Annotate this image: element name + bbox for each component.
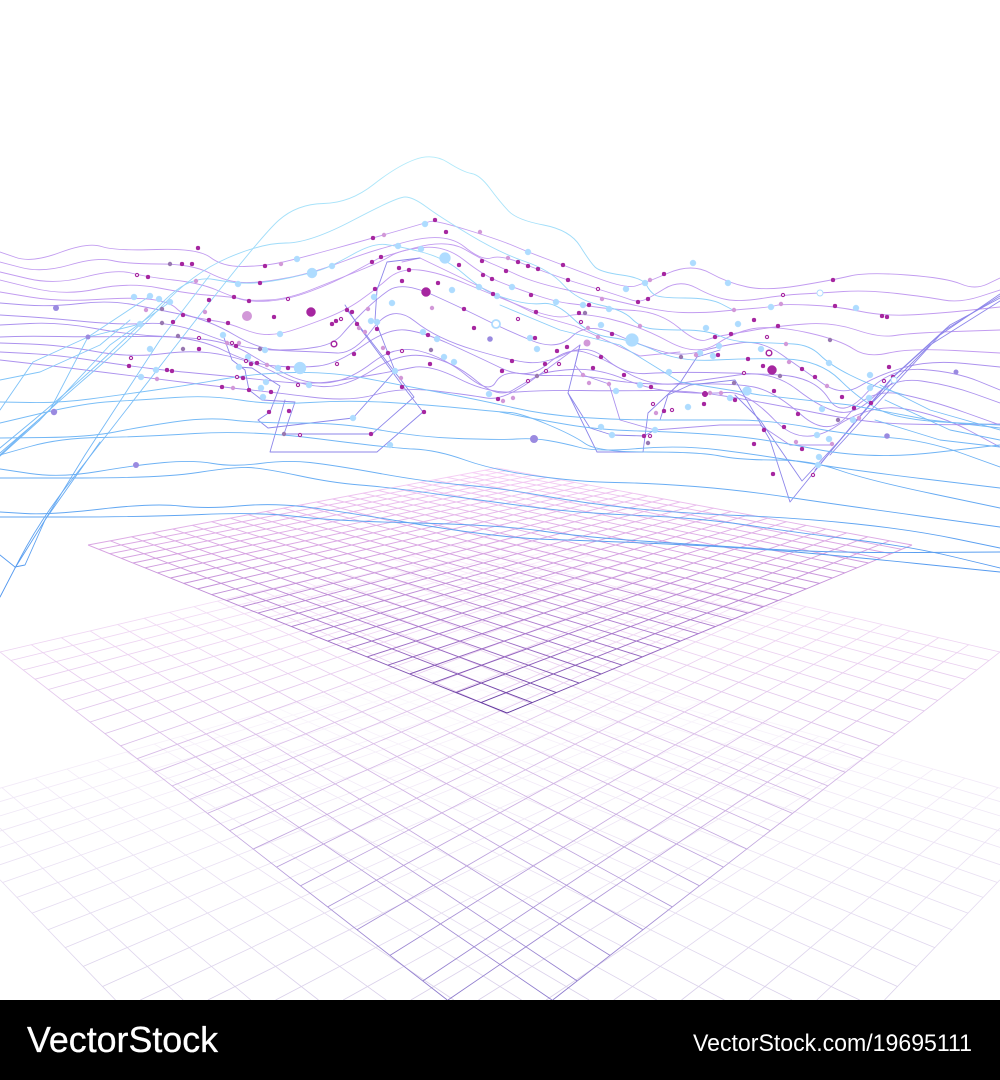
data points: pink dots <box>144 230 861 446</box>
footer brand wordmark: VectorStock <box>27 1019 219 1060</box>
wave lines: violet middle lines <box>0 287 1000 447</box>
grid: middle floor grid <box>0 535 1000 1000</box>
wave lines: pale blue peaks and lower blue lines <box>0 157 1000 597</box>
grid: faint outer floor grid <box>0 645 1000 1000</box>
grid: central floating grid <box>85 468 919 713</box>
data points: light blue dots <box>131 221 873 468</box>
data points: hollow ring markers <box>129 273 897 477</box>
data points: periwinkle and grey dots <box>51 262 959 468</box>
wave lines: loops left and centre, valley V <box>223 258 1000 502</box>
footer bar <box>0 1000 1000 1080</box>
wave lines: purple ridge lines <box>0 221 1000 356</box>
footer image id: VectorStock.com/19695111 <box>693 1030 972 1057</box>
data points: magenta dots <box>127 218 895 476</box>
